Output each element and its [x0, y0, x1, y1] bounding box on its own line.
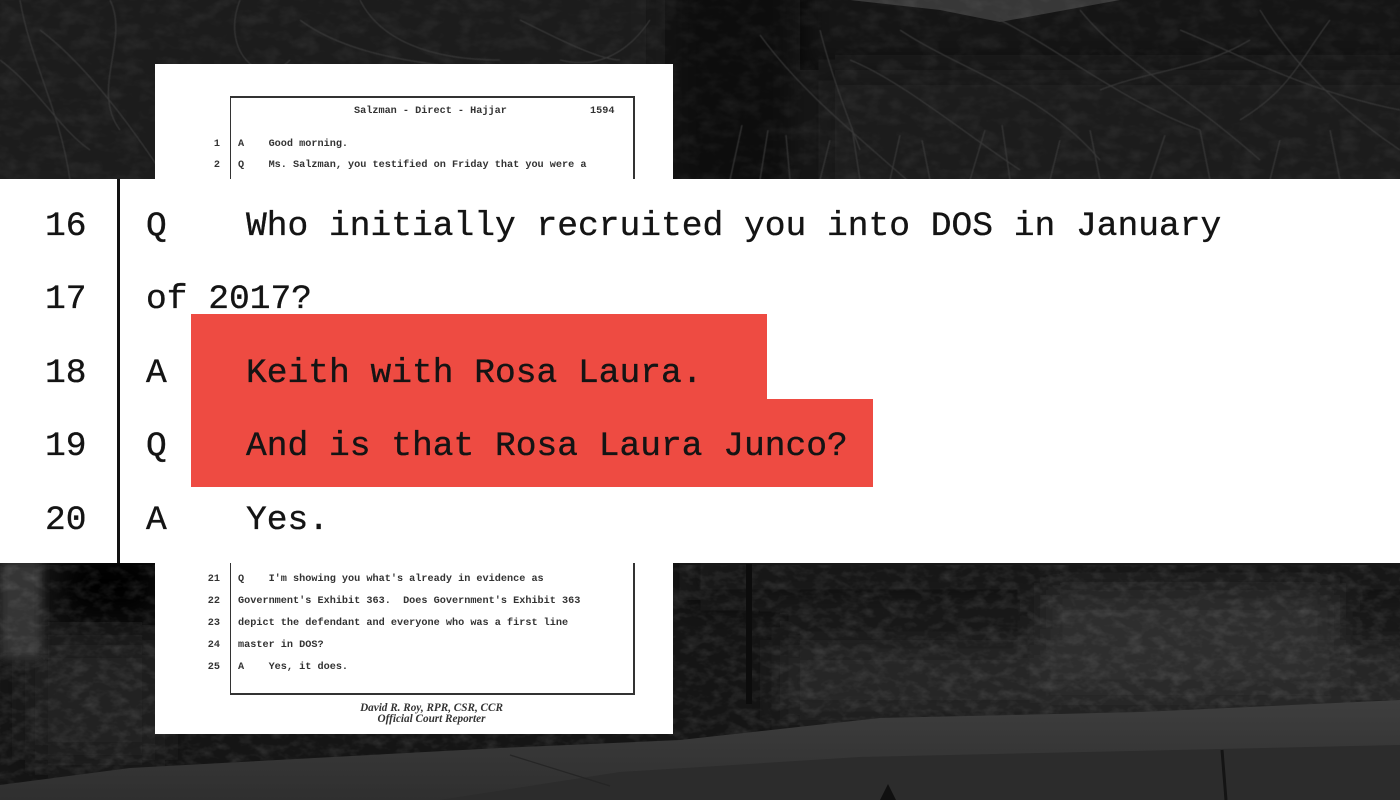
transcript frame — [230, 96, 635, 695]
line number 19: 19 — [45, 427, 87, 466]
brush textures — [0, 0, 1400, 180]
speaker Q line 19: Q — [146, 427, 167, 466]
speaker A line 20: A — [146, 501, 167, 540]
line 22 text: Government's Exhibit 363. Does Government's Exhibit 363 — [238, 596, 580, 607]
line 1 text: A Good morning. — [238, 139, 348, 150]
line 24: 24 — [208, 640, 220, 651]
court reporter credit: David R. Roy, RPR, CSR, CCR — [360, 702, 503, 714]
line number 16: 16 — [45, 207, 87, 246]
speaker A line 18: A — [146, 354, 167, 393]
page number: 1594 — [590, 106, 614, 117]
line number 17: 17 — [45, 280, 87, 319]
question line 16: Who initially recruited you into DOS in January — [246, 207, 1221, 246]
red highlight upper — [191, 314, 767, 404]
line 1: 1 — [214, 139, 220, 150]
line number 18: 18 — [45, 354, 87, 393]
enlarged transcript band — [0, 179, 1400, 563]
transcript page — [155, 64, 673, 734]
red highlight lower — [191, 399, 873, 487]
line 22: 22 — [208, 596, 220, 607]
court reporter credit: Official Court Reporter — [378, 713, 485, 725]
page header: Salzman - Direct - Hajjar — [354, 106, 507, 117]
line 23: 23 — [208, 618, 220, 629]
court reporter credit — [360, 702, 503, 725]
line 21: 21 — [208, 574, 220, 585]
line 2 text: Q Ms. Salzman, you testified on Friday that you were a — [238, 160, 586, 171]
line 25: 25 — [208, 662, 220, 673]
line 24 text: master in DOS? — [238, 640, 324, 651]
question line 19: And is that Rosa Laura Junco? — [246, 427, 848, 466]
question line 17: of 2017? — [146, 280, 312, 319]
line number 20: 20 — [45, 501, 87, 540]
line 25 text: A Yes, it does. — [238, 662, 348, 673]
answer line 20: Yes. — [246, 501, 329, 540]
vertical margin rule — [117, 179, 120, 563]
line 21 text: Q I'm showing you what's already in evidence as — [238, 574, 544, 585]
line 23 text: depict the defendant and everyone who was a first line — [238, 618, 568, 629]
line 2: 2 — [214, 160, 220, 171]
speaker Q line 16: Q — [146, 207, 167, 246]
answer line 18: Keith with Rosa Laura. — [246, 354, 703, 393]
